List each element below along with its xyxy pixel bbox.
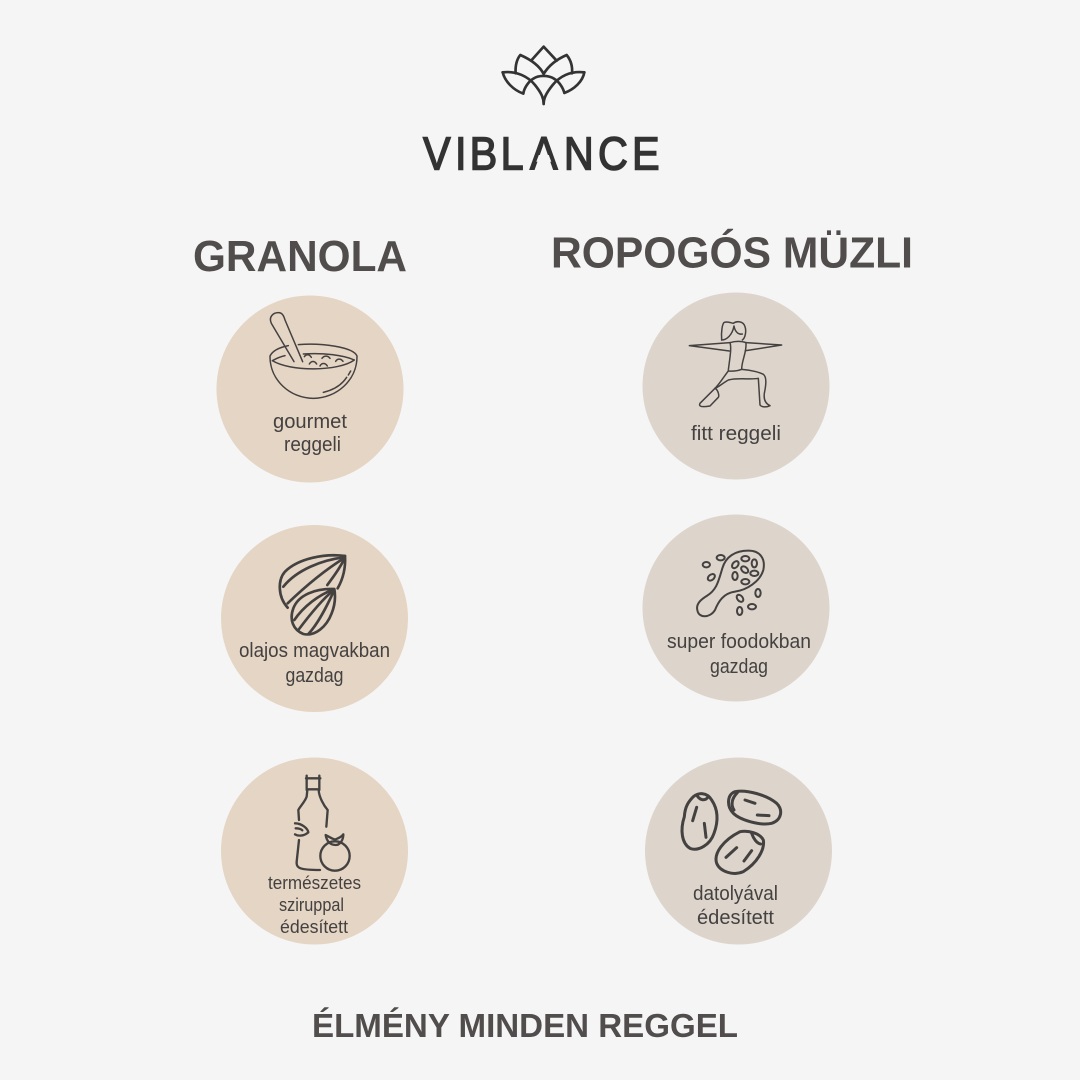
circle	[216, 296, 404, 482]
wordmark: VIBLANCE	[423, 129, 660, 180]
heading: granola: GRANOLA	[193, 232, 407, 281]
label: gazdag	[710, 656, 768, 678]
icon: dates	[682, 791, 781, 873]
label: gourmet	[273, 411, 347, 433]
label	[239, 640, 390, 687]
footer tagline: ÉLMÉNY MINDEN REGGEL	[312, 1007, 738, 1044]
label	[667, 631, 811, 678]
logo	[423, 47, 660, 180]
icon: yoga figure	[689, 322, 782, 407]
label: édesített	[697, 907, 774, 929]
label: super foodokban	[667, 631, 811, 653]
label: sziruppal	[279, 895, 344, 915]
icon: lotus	[503, 47, 584, 104]
heading: ropogos muzli: ROPOGÓS MÜZLI	[551, 228, 913, 278]
icon: bowl	[270, 313, 357, 398]
circle	[221, 758, 408, 944]
panel: gourmet reggeli	[216, 296, 404, 482]
label	[268, 873, 361, 937]
label: természetes	[268, 873, 361, 893]
icon: spoon with seeds	[697, 551, 764, 616]
circle	[221, 525, 408, 712]
label: gazdag	[286, 665, 344, 687]
panel: fitt reggeli	[642, 292, 830, 480]
label	[273, 411, 347, 456]
panel: super foodokban gazdag	[642, 514, 830, 702]
panel: olajos magvakban gazdag	[221, 525, 408, 712]
panel: datolyaval edesitett	[645, 758, 832, 944]
circle	[642, 292, 830, 480]
circle	[645, 758, 832, 944]
label	[693, 883, 778, 929]
circle	[642, 514, 830, 702]
label: fitt reggeli	[691, 423, 781, 445]
icon: almonds	[280, 555, 345, 634]
label: datolyával	[693, 883, 778, 905]
label: reggeli	[284, 434, 341, 456]
panel: termeszetes sziruppal edesitett	[221, 758, 408, 944]
label: olajos magvakban	[239, 640, 390, 662]
label: édesített	[280, 917, 348, 937]
icon: syrup bottle and fruit	[295, 776, 350, 871]
